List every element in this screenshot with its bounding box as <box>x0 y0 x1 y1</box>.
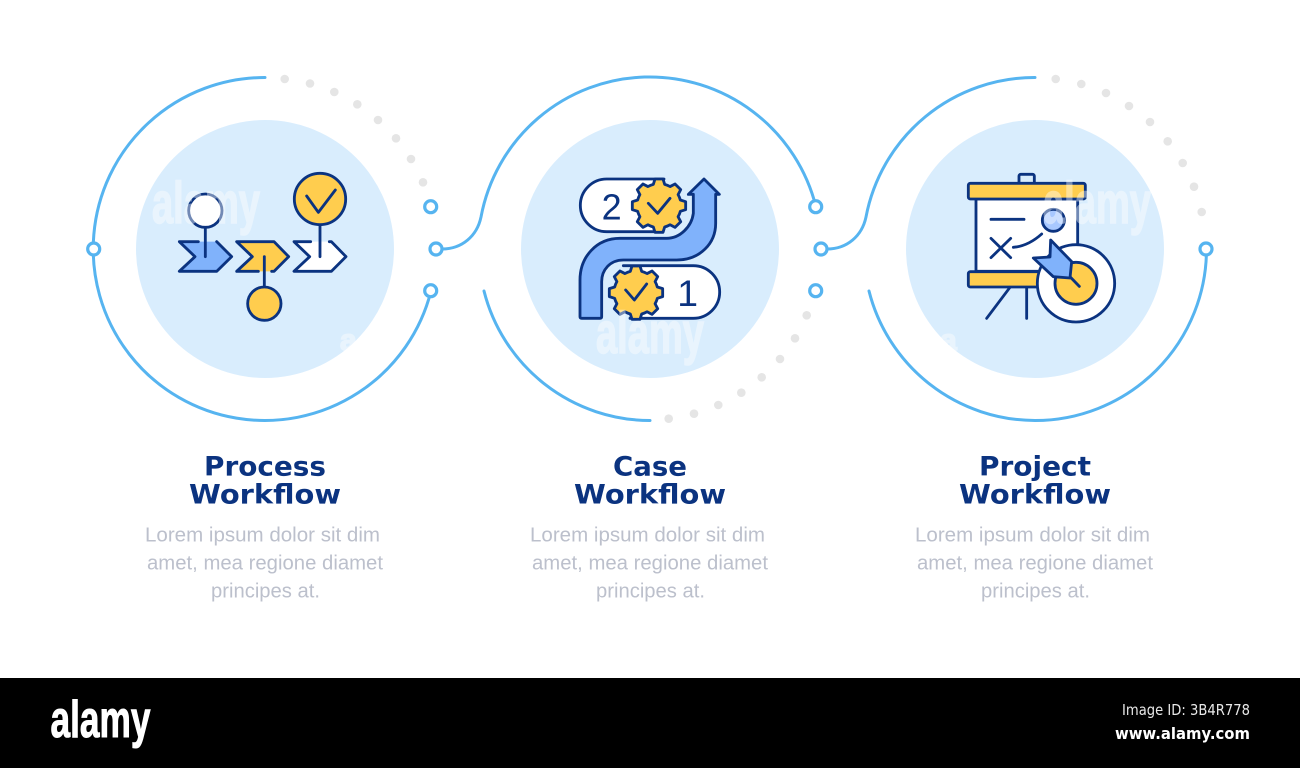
text block: process description <box>145 524 383 602</box>
watermark: process <box>152 171 357 357</box>
heading: process workflow: Workflow <box>189 480 341 510</box>
watermark: case: alamy <box>596 301 704 366</box>
image id: Image ID: 3B4R778 <box>1122 701 1250 719</box>
text block: case description: Lorem ipsum dolor sit dim <box>530 524 765 546</box>
background circle: project <box>906 120 1164 378</box>
icon: case steps with gears and arrow <box>580 179 720 319</box>
ring nodes: project <box>815 243 1212 255</box>
text block: process description: Lorem ipsum dolor sit dim <box>145 524 380 546</box>
watermark: process: a <box>340 324 357 357</box>
text block: case description <box>530 524 768 602</box>
icon: case steps with gears and arrow: 2 <box>602 186 622 227</box>
heading: case workflow <box>574 452 726 510</box>
ring arc: case lower <box>484 291 650 420</box>
icon: presentation board with target <box>968 174 1115 322</box>
text block: project description: amet, mea regione diamet <box>917 552 1153 574</box>
watermark: process: alamy <box>152 171 260 236</box>
text block: process description: principes at. <box>211 580 320 602</box>
dotted arc: case <box>664 311 811 423</box>
icon: process flow chevrons <box>179 173 346 320</box>
panel: case workflow <box>430 77 822 602</box>
heading: case workflow: Case <box>613 452 687 482</box>
footer bar <box>0 678 1300 768</box>
background circle: case <box>521 120 779 378</box>
heading: project workflow <box>959 452 1111 510</box>
watermark: project: a <box>940 324 957 357</box>
ring arc: case upper with connector <box>442 77 816 249</box>
text block: project description <box>915 524 1153 602</box>
text block: case description: principes at. <box>596 580 705 602</box>
heading: project workflow: Workflow <box>959 480 1111 510</box>
text block: case description: amet, mea regione diamet <box>532 552 768 574</box>
heading: process workflow <box>189 452 341 510</box>
text block: project description: principes at. <box>981 580 1090 602</box>
ring arc: project lower <box>869 249 1206 420</box>
watermark: project <box>940 171 1151 357</box>
ring nodes: case <box>430 201 822 297</box>
dotted arc: process <box>280 75 427 187</box>
watermark: project: alamy <box>1043 171 1151 236</box>
panel: process workflow <box>88 75 437 602</box>
text block: process description: amet, mea regione diamet <box>147 552 383 574</box>
heading: case workflow: Workflow <box>574 480 726 510</box>
text block: project description: Lorem ipsum dolor sit dim <box>915 524 1150 546</box>
panel: project workflow <box>815 75 1212 602</box>
ring arc: project upper with connector <box>827 77 1035 249</box>
dotted arc: project <box>1051 75 1206 216</box>
footer logo: alamy <box>50 691 151 749</box>
ring nodes: process <box>88 201 437 297</box>
ring arc: process <box>93 77 431 420</box>
heading: process workflow: Process <box>204 452 326 482</box>
website url: www.alamy.com <box>1115 724 1250 743</box>
background circle: process <box>136 120 394 378</box>
heading: project workflow: Project <box>979 452 1091 482</box>
icon: case steps with gears and arrow: 1 <box>677 272 698 314</box>
